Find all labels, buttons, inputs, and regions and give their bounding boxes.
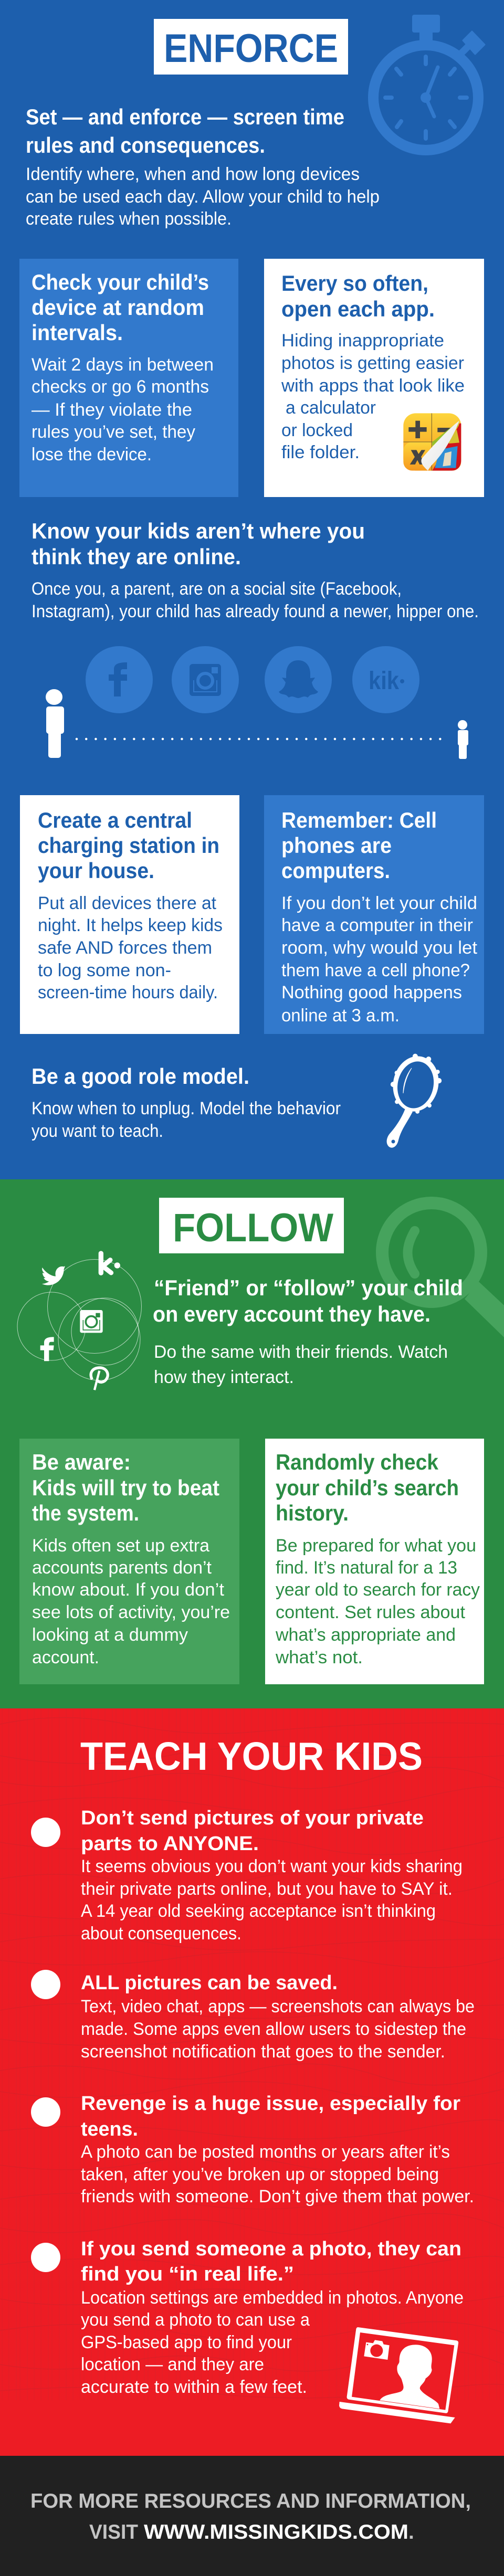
icon: kik circle: kik bbox=[369, 667, 399, 695]
list item: revenge: taken, after you’ve broken up or stopped being bbox=[81, 2165, 439, 2184]
panel: check device: lose the device. bbox=[32, 445, 152, 464]
icon: twitter bird bbox=[42, 1266, 65, 1285]
panel: charging station: charging station in bbox=[38, 833, 219, 858]
text block: set and enforce: rules and consequences. bbox=[26, 133, 265, 157]
panel: phones are computers: Nothing good happens bbox=[281, 983, 462, 1002]
icon: kik circle bbox=[352, 646, 419, 713]
list item: in real life: location — and they are bbox=[81, 2355, 264, 2374]
title: enforce: ENFORCE bbox=[164, 26, 338, 71]
panel: be aware: looking at a dummy bbox=[32, 1625, 188, 1645]
text block: friend or follow: on every account they have. bbox=[153, 1302, 430, 1326]
list item: private parts: It seems obvious you don’t want your kids sharing bbox=[81, 1856, 463, 1876]
list item: private parts: Don’t send pictures of your private bbox=[81, 1807, 424, 1829]
icon: parent figure bbox=[46, 689, 64, 758]
panel: charging station: screen-time hours daily. bbox=[38, 983, 218, 1002]
list item: in real life bbox=[31, 2238, 464, 2397]
panel: check device: device at random bbox=[32, 295, 204, 320]
list item: all pictures can be saved: screenshot notification that goes to the sender. bbox=[81, 2042, 445, 2062]
panel: follow section bbox=[0, 1179, 504, 1708]
panel: search history: Randomly check bbox=[276, 1450, 439, 1474]
dotted connection line bbox=[77, 738, 441, 740]
panel: check device: — If they violate the bbox=[32, 400, 192, 420]
panel: enforce section bbox=[0, 0, 504, 1179]
panel: charging station: Put all devices there at bbox=[38, 893, 217, 913]
panel: check device: rules you’ve set, they bbox=[32, 422, 195, 442]
list item: in real life: Location settings are embedded in photos. Anyone bbox=[81, 2288, 464, 2308]
text block: know your kids bbox=[32, 519, 479, 621]
icon: hand mirror bbox=[386, 1050, 446, 1148]
panel: be aware: the system. bbox=[32, 1501, 139, 1525]
text block: friend or follow: how they interact. bbox=[154, 1367, 294, 1387]
panel: charging station: Create a central bbox=[38, 808, 192, 832]
panel: phones are computers: computers. bbox=[281, 858, 390, 883]
list item: private parts: their private parts online, but you have to SAY it. bbox=[81, 1879, 453, 1899]
footer: . bbox=[408, 2521, 414, 2543]
panel: charging station: night. It helps keep kids bbox=[38, 915, 223, 935]
text block: know your kids: Instagram), your child has already found a newer, hipper one. bbox=[32, 601, 479, 621]
text block: role model: Know when to unplug. Model the behavior bbox=[32, 1099, 341, 1118]
panel: teach your kids section bbox=[0, 1708, 504, 2456]
list item: in real life: find you “in real life.” bbox=[81, 2263, 294, 2285]
panel: phones are computers bbox=[264, 795, 484, 1034]
list item: in real life: GPS-based app to find your bbox=[81, 2332, 292, 2352]
panel: search history: Be prepared for what you bbox=[276, 1536, 476, 1556]
icon: facebook logo bbox=[40, 1337, 54, 1361]
list item: all pictures can be saved: made. Some apps even allow users to sidestep the bbox=[81, 2019, 466, 2039]
panel: open each app: open each app. bbox=[281, 297, 435, 321]
panel: open each app: Hiding inappropriate bbox=[281, 331, 444, 351]
panel: open each app bbox=[264, 259, 484, 497]
text block: know your kids: Once you, a parent, are on a social site (Facebook, bbox=[32, 579, 402, 599]
panel: search history: content. Set rules about bbox=[276, 1602, 466, 1622]
footer: FOR MORE RESOURCES AND INFORMATION, bbox=[30, 2490, 471, 2512]
list item: in real life: you send a photo to can use a bbox=[81, 2310, 310, 2330]
footer: VISIT bbox=[89, 2521, 138, 2543]
panel: search history: history. bbox=[276, 1501, 349, 1525]
footer: WWW.MISSINGKIDS.COM bbox=[144, 2521, 408, 2543]
list item: private parts: about consequences. bbox=[81, 1924, 242, 1944]
footer bbox=[0, 2456, 504, 2576]
list item: in real life: accurate to within a few feet. bbox=[81, 2377, 307, 2397]
text block: set and enforce: Set — and enforce — screen time bbox=[26, 104, 344, 129]
diagram: social network circles bbox=[17, 1251, 142, 1390]
text block: know your kids: Know your kids aren’t where you bbox=[32, 519, 365, 543]
list item: private parts: parts to ANYONE. bbox=[81, 1833, 259, 1855]
panel: phones are computers: If you don’t let your child bbox=[281, 893, 477, 913]
text block: role model bbox=[32, 1064, 341, 1141]
panel: charging station: your house. bbox=[38, 858, 154, 883]
panel: phones are computers: Remember: Cell bbox=[281, 808, 437, 832]
panel: search history: what’s appropriate and bbox=[275, 1625, 456, 1645]
panel: open each app: a calculator bbox=[286, 398, 376, 418]
list item: revenge bbox=[31, 2093, 474, 2207]
icon: pinterest logo bbox=[91, 1368, 108, 1390]
panel: check device bbox=[19, 259, 238, 497]
panel: open each app: Every so often, bbox=[281, 271, 428, 295]
list item: private parts bbox=[31, 1807, 463, 1944]
panel: phones are computers: have a computer in their bbox=[281, 915, 473, 935]
icon: magnifying glass bbox=[382, 1203, 504, 1337]
panel: check device: checks or go 6 months bbox=[32, 377, 209, 397]
panel: search history bbox=[265, 1439, 484, 1684]
panel: charging station bbox=[20, 795, 239, 1034]
icon: laptop with person bbox=[339, 2327, 458, 2423]
text block: set and enforce: create rules when possible. bbox=[26, 209, 232, 229]
panel: be aware bbox=[19, 1439, 239, 1684]
list item: in real life: If you send someone a photo, they can bbox=[81, 2238, 461, 2260]
text block: friend or follow: Do the same with their friends. Watch bbox=[154, 1342, 448, 1362]
panel: be aware: Be aware: bbox=[32, 1450, 131, 1474]
panel: check device: Check your child’s bbox=[32, 270, 209, 294]
panel: be aware: see lots of activity, you’re bbox=[32, 1602, 230, 1622]
list item: revenge: A photo can be posted months or years after it’s bbox=[81, 2142, 450, 2162]
panel: open each app: photos is getting easier bbox=[281, 353, 464, 373]
icon: child figure bbox=[458, 720, 468, 759]
icon: snapchat circle bbox=[265, 646, 332, 713]
panel: search history: find. It’s natural for a 13 bbox=[276, 1558, 457, 1578]
text block: know your kids: think they are online. bbox=[32, 544, 241, 569]
list item: revenge: friends with someone. Don’t give them that power. bbox=[81, 2187, 474, 2207]
icon: calculator app bbox=[403, 413, 461, 471]
panel: phones are computers: online at 3 a.m. bbox=[281, 1006, 400, 1026]
panel: be aware: Kids will try to beat bbox=[32, 1475, 219, 1500]
text block: set and enforce bbox=[26, 104, 380, 229]
icon: instagram circle bbox=[172, 646, 239, 713]
panel: phones are computers: room, why would you let bbox=[281, 938, 478, 958]
panel: check device: Wait 2 days in between bbox=[32, 355, 214, 375]
list item: all pictures can be saved bbox=[31, 1970, 475, 2062]
text block: friend or follow: “Friend” or “follow” your child bbox=[154, 1275, 463, 1300]
panel: search history: year old to search for racy bbox=[276, 1580, 480, 1600]
icon: stopwatch bbox=[373, 15, 485, 150]
text block: role model: you want to teach. bbox=[32, 1121, 163, 1141]
panel: be aware: Kids often set up extra bbox=[32, 1536, 209, 1556]
panel: charging station: safe AND forces them bbox=[38, 938, 212, 958]
panel: search history: what’s not. bbox=[275, 1648, 363, 1667]
text block: set and enforce: can be used each day. Allow your child to help bbox=[26, 187, 380, 207]
list item: all pictures can be saved: ALL pictures can be saved. bbox=[81, 1972, 338, 1994]
icon: kik logo bbox=[99, 1251, 120, 1275]
icon: instagram logo bbox=[80, 1310, 103, 1333]
list item: revenge: Revenge is a huge issue, especially for bbox=[81, 2093, 460, 2115]
text block: friend or follow bbox=[153, 1275, 463, 1387]
title: teach your kids: TEACH YOUR KIDS bbox=[80, 1734, 423, 1778]
panel: phones are computers: them have a cell phone? bbox=[281, 960, 470, 980]
panel: search history: your child’s search bbox=[276, 1475, 459, 1500]
text block: role model: Be a good role model. bbox=[32, 1064, 249, 1089]
panel: phones are computers: phones are bbox=[281, 833, 392, 858]
panel: be aware: know about. If you don’t bbox=[32, 1580, 225, 1600]
panel: charging station: to log some non- bbox=[38, 960, 171, 980]
icon: facebook circle bbox=[86, 646, 153, 713]
list item: all pictures can be saved: Text, video chat, apps — screenshots can always be bbox=[81, 1997, 475, 2017]
list item: private parts: A 14 year old seeking acceptance isn’t thinking bbox=[81, 1901, 436, 1921]
panel: open each app: file folder. bbox=[281, 442, 360, 462]
text block: set and enforce: Identify where, when and how long devices bbox=[26, 164, 360, 184]
title: follow: FOLLOW bbox=[173, 1206, 333, 1250]
panel: check device: intervals. bbox=[32, 320, 123, 345]
panel: open each app: with apps that look like bbox=[281, 376, 465, 396]
panel: be aware: accounts parents don’t bbox=[32, 1558, 212, 1578]
panel: open each app: or locked bbox=[281, 420, 353, 440]
panel: be aware: account. bbox=[32, 1648, 99, 1667]
list item: revenge: teens. bbox=[81, 2118, 138, 2140]
